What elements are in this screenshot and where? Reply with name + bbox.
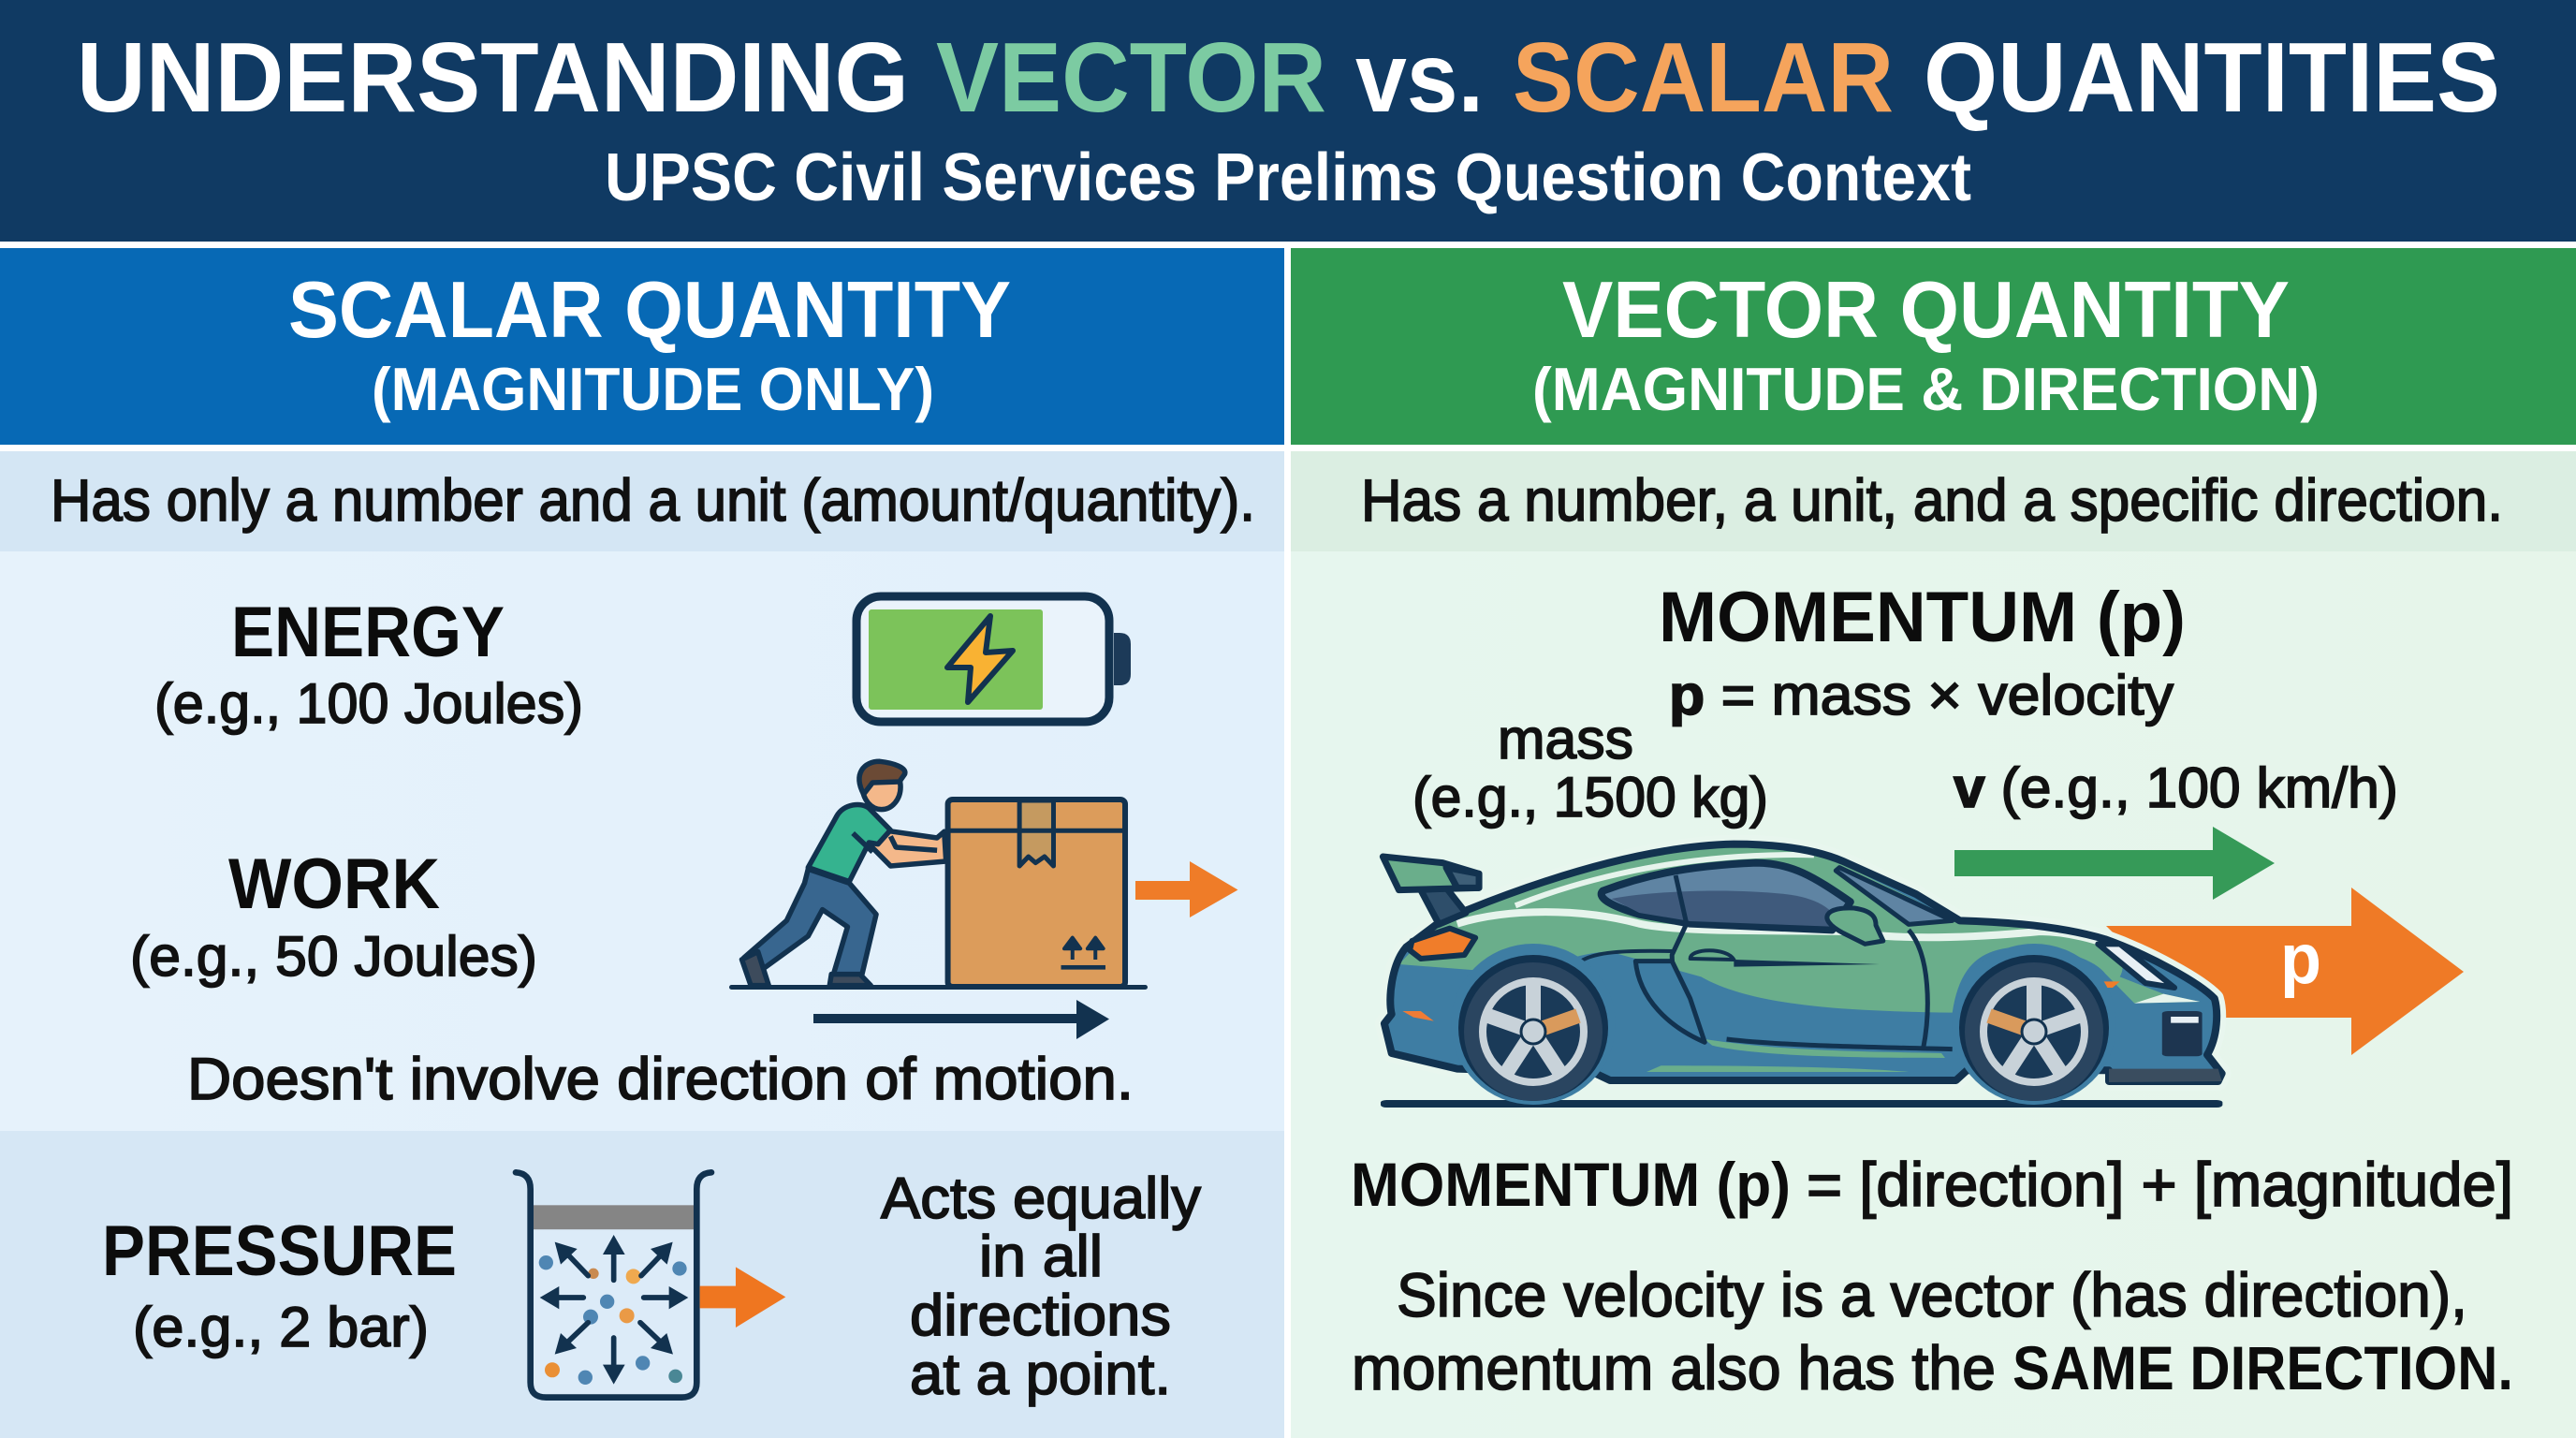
direction note: Doesn't involve direction of motion. <box>187 1047 1134 1112</box>
scalar definition: Has only a number and a unit (amount/quantity). <box>51 468 1255 534</box>
mass label <box>1412 708 1768 829</box>
momentum heading: MOMENTUM (p) <box>1659 578 2186 657</box>
ground line <box>729 985 1148 990</box>
title: vs. <box>1355 22 1484 133</box>
vector heading: VECTOR QUANTITY <box>1562 266 2290 355</box>
spoiler <box>1383 857 1479 924</box>
subtitle: UPSC Civil Services Prelims Question Context <box>605 140 1971 215</box>
pressure label: PRESSURE <box>102 1211 457 1291</box>
front details <box>1402 981 2222 1082</box>
mass label: (e.g., 1500 kg) <box>1412 766 1768 829</box>
arrow: push force <box>1135 861 1237 917</box>
title: QUANTITIES <box>1924 22 2500 133</box>
work label: WORK <box>228 844 440 924</box>
pressure note: Acts equally <box>881 1167 1201 1231</box>
momentum heading: p = mass × velocity <box>1669 664 2174 726</box>
car body <box>1384 844 2222 1081</box>
momentum equation: MOMENTUM (p) <box>1351 1150 1791 1219</box>
scalar examples background <box>0 551 1284 1131</box>
vector definition: Has a number, a unit, and a specific direction. <box>1361 468 2503 534</box>
work label: (e.g., 50 Joules) <box>130 925 537 988</box>
door details <box>1581 908 1883 1042</box>
box <box>948 800 1125 987</box>
icon: beaker with pressure arrows <box>516 1172 785 1398</box>
arrow: velocity <box>1954 827 2275 900</box>
conclusion text: Since velocity is a vector (has direction), <box>1397 1260 2467 1329</box>
pressure section <box>0 1131 1284 1438</box>
conclusion text <box>1352 1260 2513 1402</box>
energy label <box>154 593 583 735</box>
title <box>77 22 2500 133</box>
energy label: (e.g., 100 Joules) <box>154 672 583 735</box>
pressure label <box>102 1211 457 1358</box>
scalar heading: SCALAR QUANTITY <box>288 266 1011 355</box>
ground line <box>1381 1100 2222 1108</box>
scalar heading: (MAGNITUDE ONLY) <box>372 355 934 423</box>
headlight <box>2098 944 2174 988</box>
rear wheel <box>1451 944 1616 1105</box>
arrow: motion direction <box>813 1000 1109 1039</box>
panel: vector quantity <box>1291 248 2576 1438</box>
vector definition <box>1291 451 2576 551</box>
pressure note: in all <box>979 1225 1103 1289</box>
momentum equation: = [direction] + [magnitude] <box>1807 1150 2513 1219</box>
title: SCALAR <box>1513 22 1894 133</box>
icon: battery <box>856 596 1131 722</box>
front wheel <box>1952 944 2116 1105</box>
person <box>742 761 946 986</box>
pressure note <box>881 1167 1201 1407</box>
illustration: sports car <box>1381 844 2222 1108</box>
tail light <box>1410 929 1475 959</box>
momentum equation <box>1351 1150 2513 1219</box>
illustration: man pushing box <box>742 761 1125 987</box>
arrow: momentum <box>2106 888 2464 1055</box>
arrow: momentum: p <box>2280 919 2321 999</box>
conclusion text: momentum also has the <box>1352 1333 1996 1402</box>
pressure note: directions <box>910 1284 1171 1348</box>
vector content background <box>1291 551 2576 1438</box>
scalar heading <box>0 248 1284 445</box>
pressure label: (e.g., 2 bar) <box>133 1296 429 1358</box>
momentum heading <box>1659 578 2186 726</box>
energy label: ENERGY <box>231 593 505 672</box>
header banner <box>0 0 2576 242</box>
vector heading: (MAGNITUDE & DIRECTION) <box>1532 355 2320 423</box>
title: VECTOR <box>936 22 1326 133</box>
windows <box>1602 863 1953 1049</box>
mass label: mass <box>1498 708 1633 770</box>
panel: scalar quantity <box>0 248 1284 1438</box>
velocity label: v (e.g., 100 km/h) <box>1954 756 2398 819</box>
conclusion text: SAME DIRECTION. <box>2012 1333 2513 1402</box>
vector heading <box>1291 248 2576 445</box>
work label <box>130 844 537 988</box>
scalar definition <box>0 451 1284 551</box>
title: UNDERSTANDING <box>77 22 909 133</box>
pressure note: at a point. <box>910 1343 1171 1407</box>
